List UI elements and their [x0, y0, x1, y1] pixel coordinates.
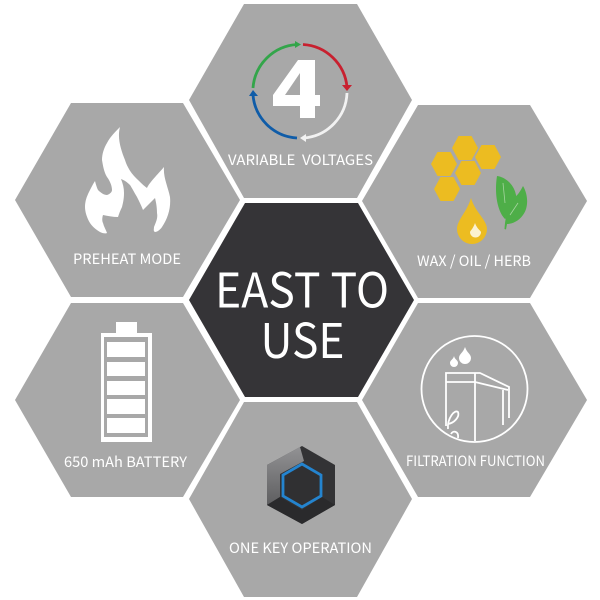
- icon: filtration circle: [422, 336, 528, 442]
- panel: filtration function: [362, 303, 587, 497]
- label: filtration function: FILTRATION FUNCTION: [406, 450, 545, 471]
- label: 650 mAh battery: 650 mAh BATTERY: [64, 451, 187, 472]
- icon: leaves: [496, 176, 527, 230]
- icon: oil drop: [457, 198, 487, 244]
- label: preheat mode: PREHEAT MODE: [73, 248, 181, 269]
- icon: flame: [85, 127, 170, 233]
- title: USE: [260, 302, 344, 372]
- title: [215, 252, 389, 372]
- panel: one key operation: [189, 402, 412, 597]
- icon: battery: [101, 322, 152, 442]
- icon: honeycomb: [431, 136, 501, 201]
- label: variable voltages: VARIABLE VOLTAGES: [228, 149, 373, 170]
- title: EAST TO: [215, 252, 389, 322]
- panel: wax oil herb: [362, 105, 587, 298]
- label: one key operation: ONE KEY OPERATION: [229, 537, 372, 558]
- label: wax oil herb: WAX / OIL / HERB: [417, 250, 531, 271]
- panel: preheat mode: [15, 103, 240, 297]
- panel: center title: [189, 203, 414, 397]
- panel: battery: [15, 303, 240, 497]
- icon: four with cycle arrows: [249, 41, 352, 142]
- panel: variable voltages: [189, 4, 412, 198]
- icon: key button: [267, 446, 335, 524]
